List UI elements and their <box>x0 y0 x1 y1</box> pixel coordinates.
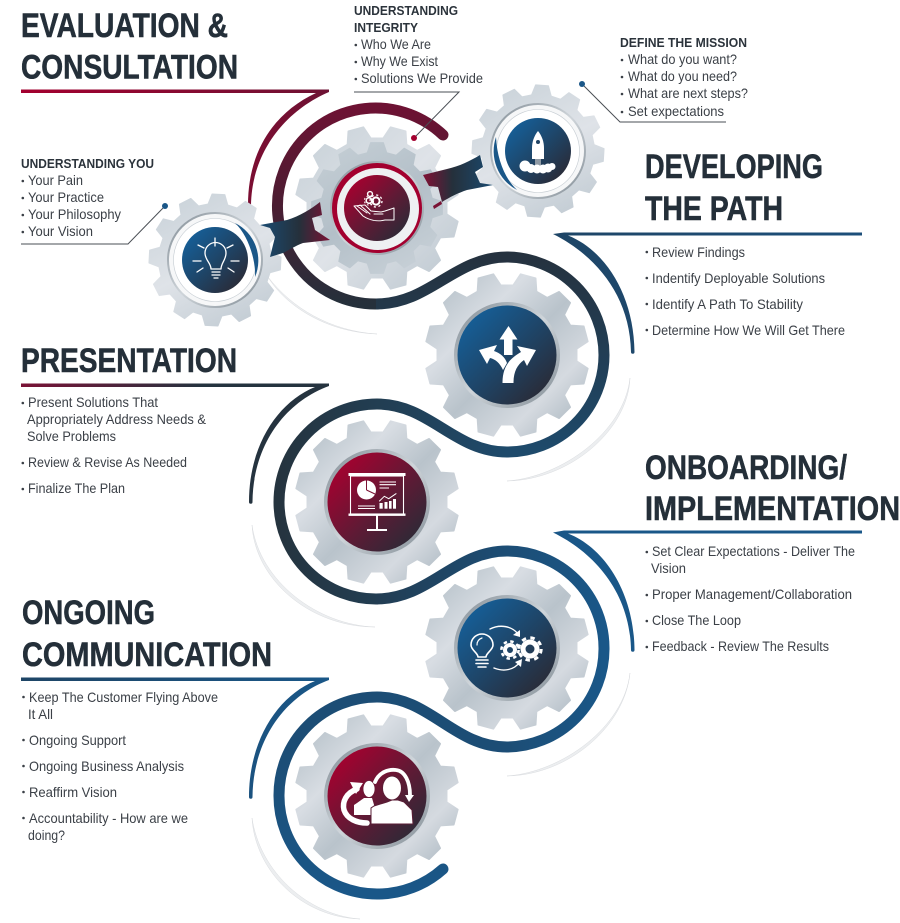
text block: define the mission: DEFINE THE MISSION <box>620 35 747 50</box>
icon: people with circular arrows <box>344 770 414 824</box>
heading: ongoing communication <box>22 594 272 674</box>
callout rule: developing the path <box>553 232 862 354</box>
text block: define the mission: What do you want? <box>628 51 737 67</box>
text block: onboarding implementation: Feedback - Review The Results <box>652 638 829 654</box>
text block: developing the path: Review Findings <box>652 244 745 260</box>
text block: ongoing communication: doing? <box>28 827 65 843</box>
heading: evaluation and consultation: EVALUATION & <box>21 7 228 45</box>
text block: onboarding implementation: Vision <box>651 560 686 576</box>
leader line: understanding you <box>21 203 168 244</box>
text block: ongoing communication: Keep The Customer Flying Above <box>29 689 218 705</box>
text block: onboarding implementation: Close The Loop <box>652 612 741 628</box>
text block: presentation: Finalize The Plan <box>28 480 125 496</box>
text block: presentation: Solve Problems <box>27 428 116 444</box>
text block: understanding you: Your Pain <box>28 172 83 188</box>
text block: understanding integrity <box>354 3 483 86</box>
heading: evaluation and consultation: CONSULTATION <box>21 48 238 86</box>
text block: define the mission: What do you need? <box>628 68 737 84</box>
text block: define the mission: Set expectations <box>628 103 724 119</box>
gear: understanding integrity <box>296 127 458 289</box>
icon: light bulb <box>193 238 239 278</box>
heading: onboarding implementation: ONBOARDING/ <box>645 449 847 487</box>
text block: ongoing communication: Ongoing Business Analysis <box>29 758 184 774</box>
connector band: right gears <box>423 155 493 209</box>
heading: presentation: PRESENTATION <box>21 342 237 380</box>
text block: understanding you <box>21 156 154 239</box>
serpentine process ribbon <box>277 108 604 894</box>
connector band: left gears <box>260 202 330 257</box>
text block: presentation: Appropriately Address Needs & <box>27 411 207 427</box>
text block: ongoing communication: Ongoing Support <box>29 732 126 748</box>
text block: understanding integrity: Who We Are <box>361 36 431 52</box>
text block: understanding integrity: UNDERSTANDING <box>354 3 458 18</box>
text block: onboarding implementation <box>646 543 855 654</box>
icon: bulb and gears <box>471 626 541 670</box>
icon: hand holding gears <box>354 192 394 221</box>
callout rule: evaluation <box>21 90 329 205</box>
icon: presentation board <box>348 473 406 531</box>
text block: ongoing communication <box>22 689 218 843</box>
heading: ongoing communication: ONGOING <box>22 594 155 632</box>
heading: ongoing communication: COMMUNICATION <box>22 636 272 674</box>
text block: ongoing communication: It All <box>28 706 53 722</box>
gear: presentation <box>296 421 458 583</box>
gear: understanding you <box>133 178 297 342</box>
text block: understanding you: UNDERSTANDING YOU <box>21 156 154 171</box>
text block: onboarding implementation: Proper Management/Collaboration <box>652 586 852 602</box>
text block: developing the path: Indentify Deployable Solutions <box>652 270 825 286</box>
gear: ongoing communication <box>296 715 458 877</box>
heading: developing the path <box>645 148 823 228</box>
callout rule: presentation <box>21 384 329 504</box>
heading: evaluation and consultation <box>21 7 238 86</box>
text block: understanding integrity: Solutions We Provide <box>361 70 483 86</box>
leader line: define the mission <box>579 81 726 122</box>
gear: define the mission <box>456 69 620 233</box>
text block: developing the path: Identify A Path To Stability <box>652 296 803 312</box>
text block: presentation: Review & Revise As Needed <box>28 454 187 470</box>
heading: developing the path: DEVELOPING <box>645 148 823 186</box>
text block: define the mission: What are next steps? <box>628 85 748 101</box>
text block: understanding integrity: Why We Exist <box>361 53 438 69</box>
gear: onboarding implementation <box>426 567 588 729</box>
text block: presentation <box>22 394 207 496</box>
text block: ongoing communication: Reaffirm Vision <box>29 784 117 800</box>
text block: understanding you: Your Practice <box>28 189 104 205</box>
text block: onboarding implementation: Set Clear Expectations - Deliver The <box>652 543 855 559</box>
leader line: understanding integrity <box>354 92 459 141</box>
heading: onboarding implementation <box>645 449 900 528</box>
text block: understanding you: Your Vision <box>28 223 93 239</box>
text block: developing the path: Determine How We Will Get There <box>652 322 845 338</box>
soft shadow arcs <box>252 277 630 919</box>
text block: ongoing communication: Accountability - How are we <box>29 810 188 826</box>
text block: developing the path <box>646 244 845 338</box>
text block: presentation: Present Solutions That <box>28 394 158 410</box>
heading: developing the path: THE PATH <box>645 190 783 228</box>
text block: understanding you: Your Philosophy <box>28 206 121 222</box>
icon: rocket launch <box>520 131 556 174</box>
callout rule: ongoing communication <box>21 678 329 799</box>
text block: define the mission <box>620 35 748 119</box>
icon: branching arrows <box>479 326 536 383</box>
text block: understanding integrity: INTEGRITY <box>354 20 418 35</box>
callout rule: onboarding <box>553 530 862 652</box>
gear: developing the path <box>426 274 588 436</box>
